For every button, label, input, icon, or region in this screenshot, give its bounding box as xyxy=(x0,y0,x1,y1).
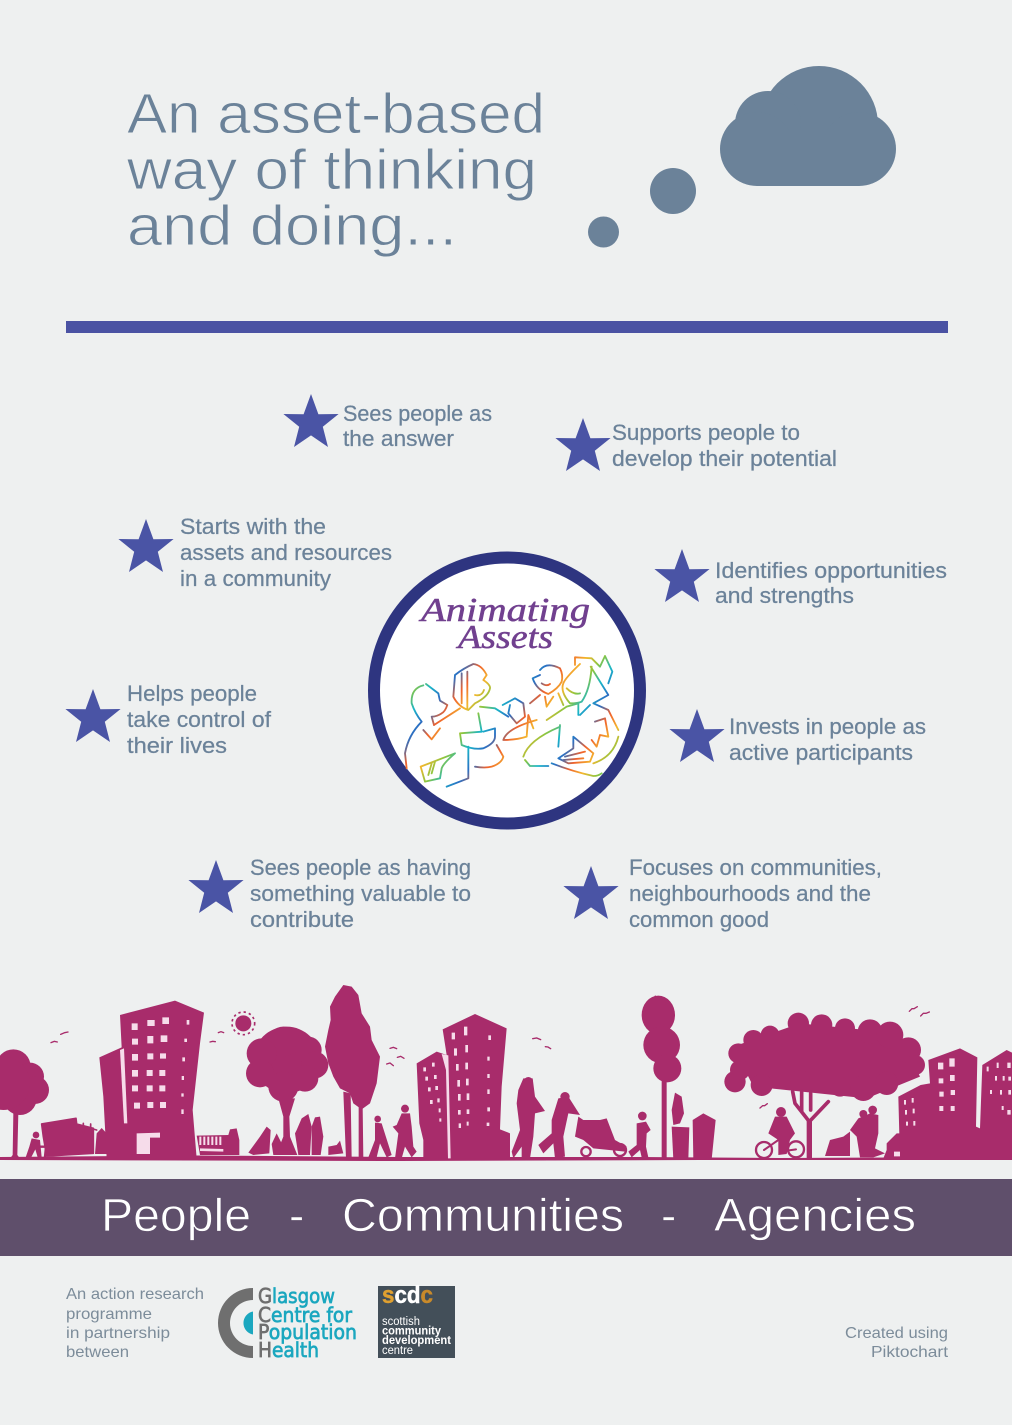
item: supports people xyxy=(555,418,837,471)
partnership text: between xyxy=(66,1344,129,1361)
title: An asset-based xyxy=(127,82,545,146)
item: helps people: Helps people xyxy=(127,681,257,706)
banner: - xyxy=(661,1189,676,1241)
tall tower block xyxy=(99,1001,204,1158)
tall poplar trees xyxy=(325,985,380,1158)
item: supports people: Supports people to xyxy=(612,420,800,445)
birds xyxy=(533,1007,929,1108)
item: starts with the assets xyxy=(118,514,392,591)
title: and doing... xyxy=(127,194,457,258)
logo wordmark: Animating xyxy=(419,592,590,629)
credit text: Created using xyxy=(845,1325,948,1342)
item: helps people: take control of xyxy=(127,707,272,732)
item: sees people as having: contribute xyxy=(250,907,354,932)
item: helps people: their lives xyxy=(127,733,227,758)
logo: scdc: scottish xyxy=(382,1316,420,1328)
banner: - xyxy=(289,1189,304,1241)
item: sees people as having xyxy=(188,855,471,932)
parent and pram xyxy=(538,1092,627,1158)
item: sees people as having: something valuable to xyxy=(250,881,471,906)
credit text xyxy=(845,1325,949,1361)
item: invests in people xyxy=(669,709,926,765)
skyline illustration xyxy=(0,985,1012,1161)
left tree xyxy=(0,1049,49,1159)
item: identifies opportunities: Identifies opportunities xyxy=(715,558,947,583)
logo: scdc: development xyxy=(382,1335,451,1347)
icon: thought cloud xyxy=(588,66,896,248)
logo: scdc xyxy=(378,1282,455,1358)
child walking xyxy=(628,1112,651,1157)
shed and fence xyxy=(42,1118,108,1156)
person with walker xyxy=(25,1132,46,1158)
title: way of thinking xyxy=(126,138,537,202)
partnership text: in partnership xyxy=(66,1325,170,1342)
partnership text xyxy=(66,1286,204,1361)
logo: Glasgow Centre for Population Health: Glasgow xyxy=(258,1284,335,1308)
cyclist xyxy=(756,1107,804,1158)
item: focuses on communities xyxy=(563,855,882,932)
central logo: Animating Assets xyxy=(374,558,640,824)
banner: Agencies xyxy=(714,1189,916,1241)
item: focuses on communities: neighbourhoods and the xyxy=(629,881,871,906)
item: starts with the assets: assets and resources xyxy=(180,540,392,565)
logo: rainbow line figures xyxy=(405,656,618,787)
banner: People xyxy=(101,1189,251,1241)
logo: scdc: scdc xyxy=(382,1282,433,1309)
logo wordmark: Assets xyxy=(456,619,553,656)
logo: Glasgow Centre for Population Health: Centre for xyxy=(258,1303,353,1327)
item: identifies opportunities xyxy=(654,549,947,608)
walking couple xyxy=(295,1114,343,1155)
logo: Glasgow Centre for Population Health xyxy=(218,1284,357,1362)
item: sees people as the answer xyxy=(283,394,492,451)
item: sees people as the answer: Sees people as xyxy=(343,401,492,426)
sun xyxy=(232,1012,255,1035)
item: supports people: develop their potential xyxy=(612,446,837,471)
left half of skyline xyxy=(0,985,510,1159)
wheelchair user and child xyxy=(248,1127,282,1155)
logo: scdc: community xyxy=(382,1326,442,1338)
logo: Glasgow Centre for Population Health: Health xyxy=(258,1338,319,1362)
ground line xyxy=(0,1156,1012,1161)
round tree xyxy=(246,1027,328,1155)
item: sees people as having: Sees people as having xyxy=(250,855,471,880)
item: helps people xyxy=(65,681,272,758)
slim tree xyxy=(642,995,681,1158)
large spreading tree xyxy=(724,1013,925,1158)
second tower block xyxy=(417,1014,510,1158)
right half of skyline xyxy=(512,995,1012,1160)
item: invests in people: Invests in people as xyxy=(729,714,926,739)
walking figures xyxy=(368,1105,417,1158)
item: focuses on communities: common good xyxy=(629,907,769,932)
logo: Glasgow Centre for Population Health: Population xyxy=(258,1320,357,1344)
item: invests in people: active participants xyxy=(729,740,913,765)
logo wordmark xyxy=(419,592,590,656)
item: starts with the assets: in a community xyxy=(180,566,331,591)
item: starts with the assets: Starts with the xyxy=(180,514,326,539)
hedge and bins xyxy=(672,1093,716,1159)
title xyxy=(126,82,545,258)
item: identifies opportunities: and strengths xyxy=(715,583,854,608)
item: sees people as the answer: the answer xyxy=(343,426,454,451)
banner: Communities xyxy=(342,1189,624,1241)
divider bar xyxy=(66,321,948,333)
couple with pram xyxy=(825,1106,901,1158)
partnership text: programme xyxy=(66,1306,152,1323)
right apartment blocks xyxy=(894,1048,1012,1160)
birds xyxy=(51,1032,404,1066)
partnership text: An action research xyxy=(66,1286,204,1303)
banner xyxy=(0,1179,1012,1256)
bench with sitting figure xyxy=(197,1128,239,1155)
logo: scdc: centre xyxy=(382,1345,413,1357)
woman walking xyxy=(512,1077,545,1158)
item: focuses on communities: Focuses on communities, xyxy=(629,855,882,880)
credit text: Piktochart xyxy=(871,1344,949,1361)
